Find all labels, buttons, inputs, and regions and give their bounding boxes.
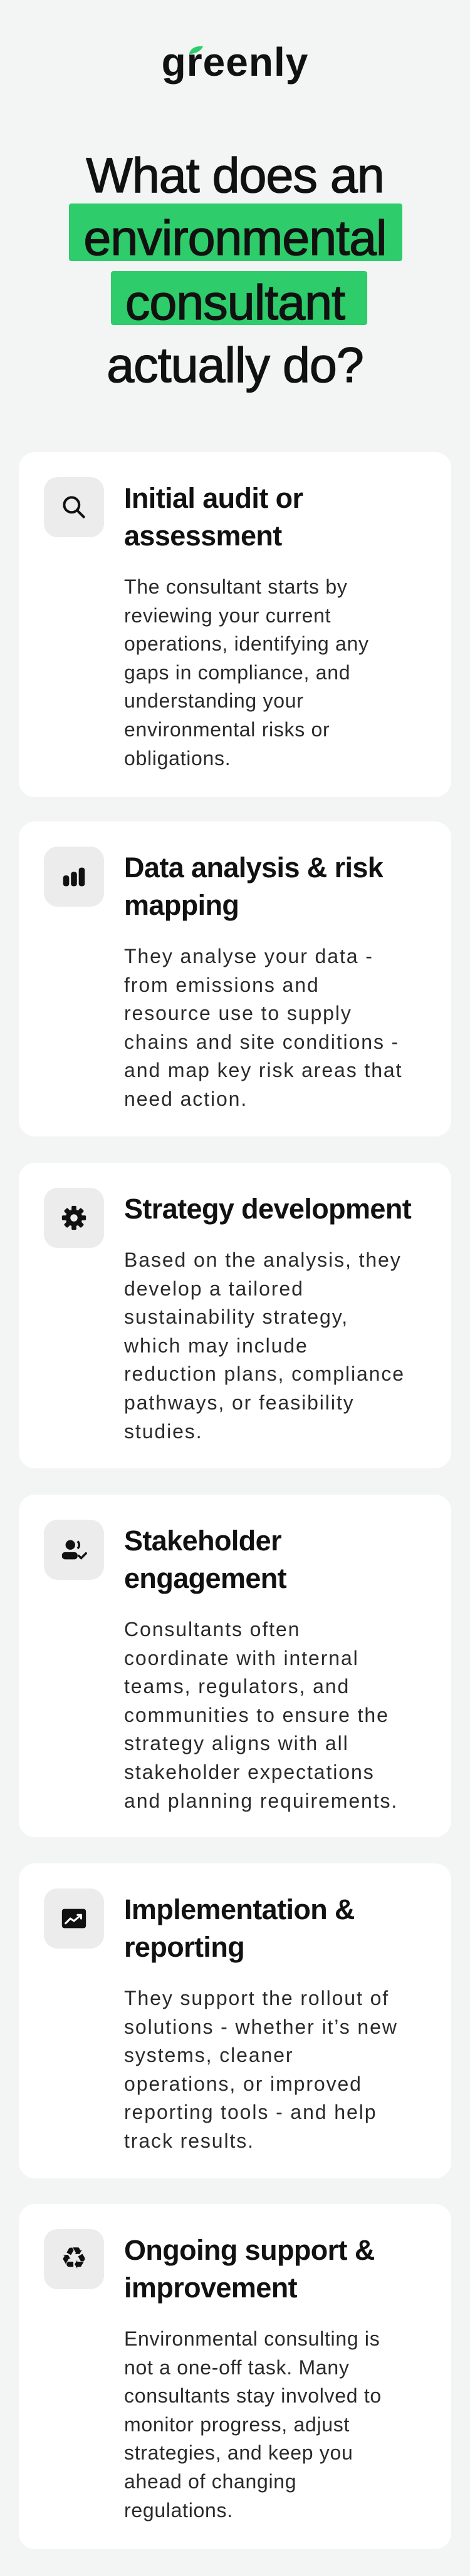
text block: teams, regulators, and (124, 1675, 350, 1698)
title: consultant (125, 274, 345, 330)
highlight: consultant (111, 271, 367, 325)
text block (124, 2327, 382, 2522)
text block: gaps in compliance, and (124, 661, 350, 684)
heading: mapping (124, 889, 239, 921)
text block: reporting tools - and help (124, 2101, 377, 2123)
text block (124, 1618, 398, 1812)
text block (124, 1987, 398, 2152)
heading (124, 852, 384, 921)
heading: engagement (124, 1562, 286, 1594)
heading: Implementation & (124, 1893, 355, 1925)
text block: and map key risk areas that (124, 1059, 402, 1081)
heading: Stakeholder (124, 1525, 281, 1557)
heading (124, 1893, 355, 1963)
panel: initial audit (19, 452, 451, 797)
text block: chains and site conditions - (124, 1031, 399, 1053)
heading: reporting (124, 1931, 244, 1963)
text block: which may include (124, 1334, 308, 1357)
text block: reviewing your current (124, 604, 331, 627)
text block (124, 575, 369, 770)
icon: gear (44, 1188, 104, 1248)
text block: and planning requirements. (124, 1790, 398, 1812)
text block: resource use to supply (124, 1002, 352, 1024)
panel: implementation (19, 1863, 451, 2178)
heading (124, 482, 303, 552)
text block: reduction plans, compliance (124, 1363, 405, 1385)
text block: stakeholder expectations (124, 1761, 375, 1783)
text block: from emissions and (124, 974, 320, 996)
text block: Consultants often (124, 1618, 300, 1641)
text block: Based on the analysis, they (124, 1249, 402, 1271)
text block: systems, cleaner (124, 2044, 293, 2066)
text block: operations, identifying any (124, 632, 369, 655)
icon: bar chart (44, 847, 104, 907)
text block: understanding your (124, 689, 304, 712)
icon: trend chart (44, 1888, 104, 1949)
heading: assessment (124, 520, 282, 552)
highlight: environmental (69, 204, 402, 261)
text block: need action. (124, 1088, 248, 1110)
panel: strategy (19, 1163, 451, 1468)
text block: The consultant starts by (124, 575, 348, 598)
text block: pathways, or feasibility (124, 1391, 355, 1414)
text block: not a one-off task. Many (124, 2356, 350, 2379)
heading: Strategy development (124, 1193, 411, 1225)
text block: strategies, and keep you (124, 2441, 353, 2464)
text block: operations, or improved (124, 2073, 362, 2095)
heading: Initial audit or (124, 482, 303, 514)
panel: ongoing support (19, 2204, 451, 2549)
text block: They analyse your data - (124, 945, 373, 967)
text block: develop a tailored (124, 1277, 304, 1300)
text block: strategy aligns with all (124, 1732, 349, 1754)
title: environmental (83, 210, 387, 265)
text block: consultants stay involved to (124, 2384, 382, 2407)
text block: obligations. (124, 747, 231, 770)
icon: magnifier (44, 477, 104, 537)
text block: monitor progress, adjust (124, 2413, 350, 2436)
title (83, 147, 387, 393)
text block: environmental risks or (124, 718, 330, 741)
text block: communities to ensure the (124, 1704, 389, 1726)
text block: studies. (124, 1420, 202, 1443)
text block: They support the rollout of (124, 1987, 389, 2009)
panel: data analysis (19, 822, 451, 1136)
text block (124, 1249, 405, 1443)
logo: greenly (162, 39, 308, 85)
text block: sustainability strategy, (124, 1306, 348, 1328)
heading (124, 1525, 287, 1594)
icon: recycle (44, 2229, 104, 2289)
text block: coordinate with internal (124, 1647, 359, 1669)
text block: regulations. (124, 2499, 233, 2522)
text block: Environmental consulting is (124, 2327, 380, 2350)
heading: Ongoing support & (124, 2234, 375, 2266)
heading: improvement (124, 2272, 297, 2304)
text block (124, 945, 402, 1110)
text block: solutions - whether it’s new (124, 2016, 398, 2038)
text block: track results. (124, 2130, 254, 2152)
heading: Data analysis & risk (124, 852, 383, 884)
title: What does an (86, 147, 384, 203)
heading (124, 2234, 375, 2304)
panel: stakeholder (19, 1495, 451, 1837)
text: actually do? (107, 337, 363, 393)
icon: person check (44, 1520, 104, 1580)
text block: ahead of changing (124, 2470, 296, 2493)
icon: recycle: ♻ (60, 2242, 88, 2275)
